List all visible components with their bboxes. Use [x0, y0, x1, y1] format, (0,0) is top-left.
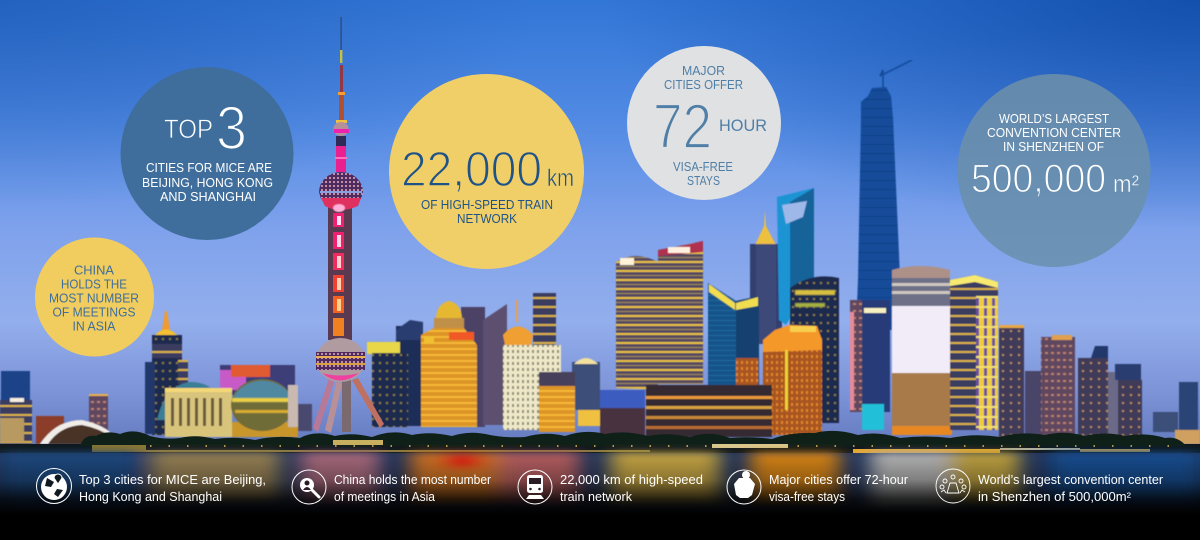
circle: 72 hour visa-free: 72 [653, 92, 712, 162]
footer fact: top 3 cities: Hong Kong and Shanghai [79, 489, 222, 504]
icon: people around a table [936, 469, 970, 503]
circle: top 3 cities: TOP [164, 114, 213, 144]
circle: high-speed train network: 22,000 [401, 143, 542, 197]
lower sphere and legs [313, 338, 384, 433]
building: gold domed tower [421, 301, 477, 427]
circle: high-speed train network: NETWORK [457, 212, 518, 226]
circle: 72 hour visa-free: MAJOR [682, 64, 725, 78]
circle: largest convention center: m² [1113, 171, 1139, 198]
building group: far left [0, 371, 110, 444]
building group: behind the pearl tower right [367, 293, 600, 427]
building: Shanghai World Financial Center [777, 188, 814, 325]
footer fact: high-speed train: 22,000 km of high-speed [560, 472, 703, 487]
building: orange lit tower [763, 325, 822, 435]
footer fact: top 3 cities: Top 3 cities for MICE are Beijing, [79, 472, 266, 487]
footer fact: meetings in Asia: of meetings in Asia [334, 489, 436, 504]
circle: most meetings in Asia: MOST NUMBER [49, 292, 139, 306]
circle: top 3 cities: BEIJING, HONG KONG [142, 175, 273, 190]
riverbank with trees and lights [0, 431, 1200, 455]
circle: 72 hour visa-free [627, 46, 781, 200]
building group: right residential towers [999, 325, 1200, 444]
circle: high-speed train network [389, 74, 584, 269]
icon: piggy bank [727, 470, 761, 504]
circle: 72 hour visa-free: STAYS [687, 174, 720, 188]
footer fact: visa-free stays [727, 470, 909, 504]
tower shaft [328, 205, 352, 340]
footer fact: convention center: World’s largest convention center [978, 472, 1164, 487]
footer fact: meetings in Asia: China holds the most number [334, 472, 492, 487]
building: tower with large white screen [892, 266, 952, 435]
skyline: Shanghai Pudong buildings [0, 60, 1200, 444]
circle: most meetings in Asia: OF MEETINGS [52, 306, 136, 320]
icon: magnifier with person [292, 470, 326, 504]
circle: 72 hour visa-free: CITIES OFFER [664, 78, 743, 92]
footer fact: high-speed train [518, 470, 703, 504]
building: Shanghai Tower with crane [856, 60, 912, 330]
building: low waterfront blocks [600, 385, 772, 437]
footer fact: high-speed train: train network [560, 489, 632, 504]
Oriental Pearl Tower [313, 17, 384, 433]
circle: most meetings in Asia: HOLDS THE [61, 278, 127, 292]
footer fact: convention center [936, 469, 1164, 504]
river water with blurred reflections [0, 452, 1200, 540]
building: Shanghai International Convention Center [157, 365, 312, 437]
circle: top 3 cities: 3 [216, 94, 247, 162]
building: tall tower with LED facade [950, 275, 998, 430]
icon: train [518, 470, 552, 504]
building group: twin curved towers [616, 241, 703, 390]
footer fact: visa-free stays: visa-free stays [769, 489, 845, 504]
footer fact: meetings in Asia [292, 470, 492, 504]
building: white lit block [503, 345, 600, 432]
footer fact: top 3 cities [36, 468, 266, 504]
circle: 72 hour visa-free: VISA-FREE [673, 160, 733, 174]
circle: most meetings in Asia [35, 238, 154, 356]
circle: top 3 cities [120, 67, 294, 240]
building group: glass towers with yellow crowns [708, 276, 839, 423]
upper sphere [319, 172, 363, 212]
footer fact: convention center: in Shenzhen of 500,000m² [978, 489, 1132, 504]
circle: high-speed train network: km [547, 165, 574, 192]
circle: high-speed train network: OF HIGH-SPEED TRAIN [421, 198, 553, 212]
circle: most meetings in Asia: IN ASIA [72, 320, 116, 334]
circle: most meetings in Asia: CHINA [74, 264, 115, 278]
circle: top 3 cities: AND SHANGHAI [160, 189, 256, 204]
circle: 72 hour visa-free: HOUR [719, 116, 767, 135]
building: pink striped tower with cyan screen [850, 300, 890, 430]
circle: top 3 cities: CITIES FOR MICE ARE [146, 160, 272, 175]
building: Jin Mao Tower [750, 210, 782, 344]
building: lit tower left [145, 311, 188, 435]
icon: globe with pin [36, 468, 72, 504]
circle: largest convention center [958, 74, 1150, 267]
circle: largest convention center: 500,000 [971, 157, 1106, 201]
circle: largest convention center: IN SHENZHEN OF [1003, 140, 1104, 154]
footer fact: visa-free stays: Major cities offer 72-hour [769, 472, 909, 487]
circle: largest convention center: CONVENTION CENTER [987, 126, 1121, 140]
circle: largest convention center: WORLD’S LARGEST [999, 112, 1109, 126]
